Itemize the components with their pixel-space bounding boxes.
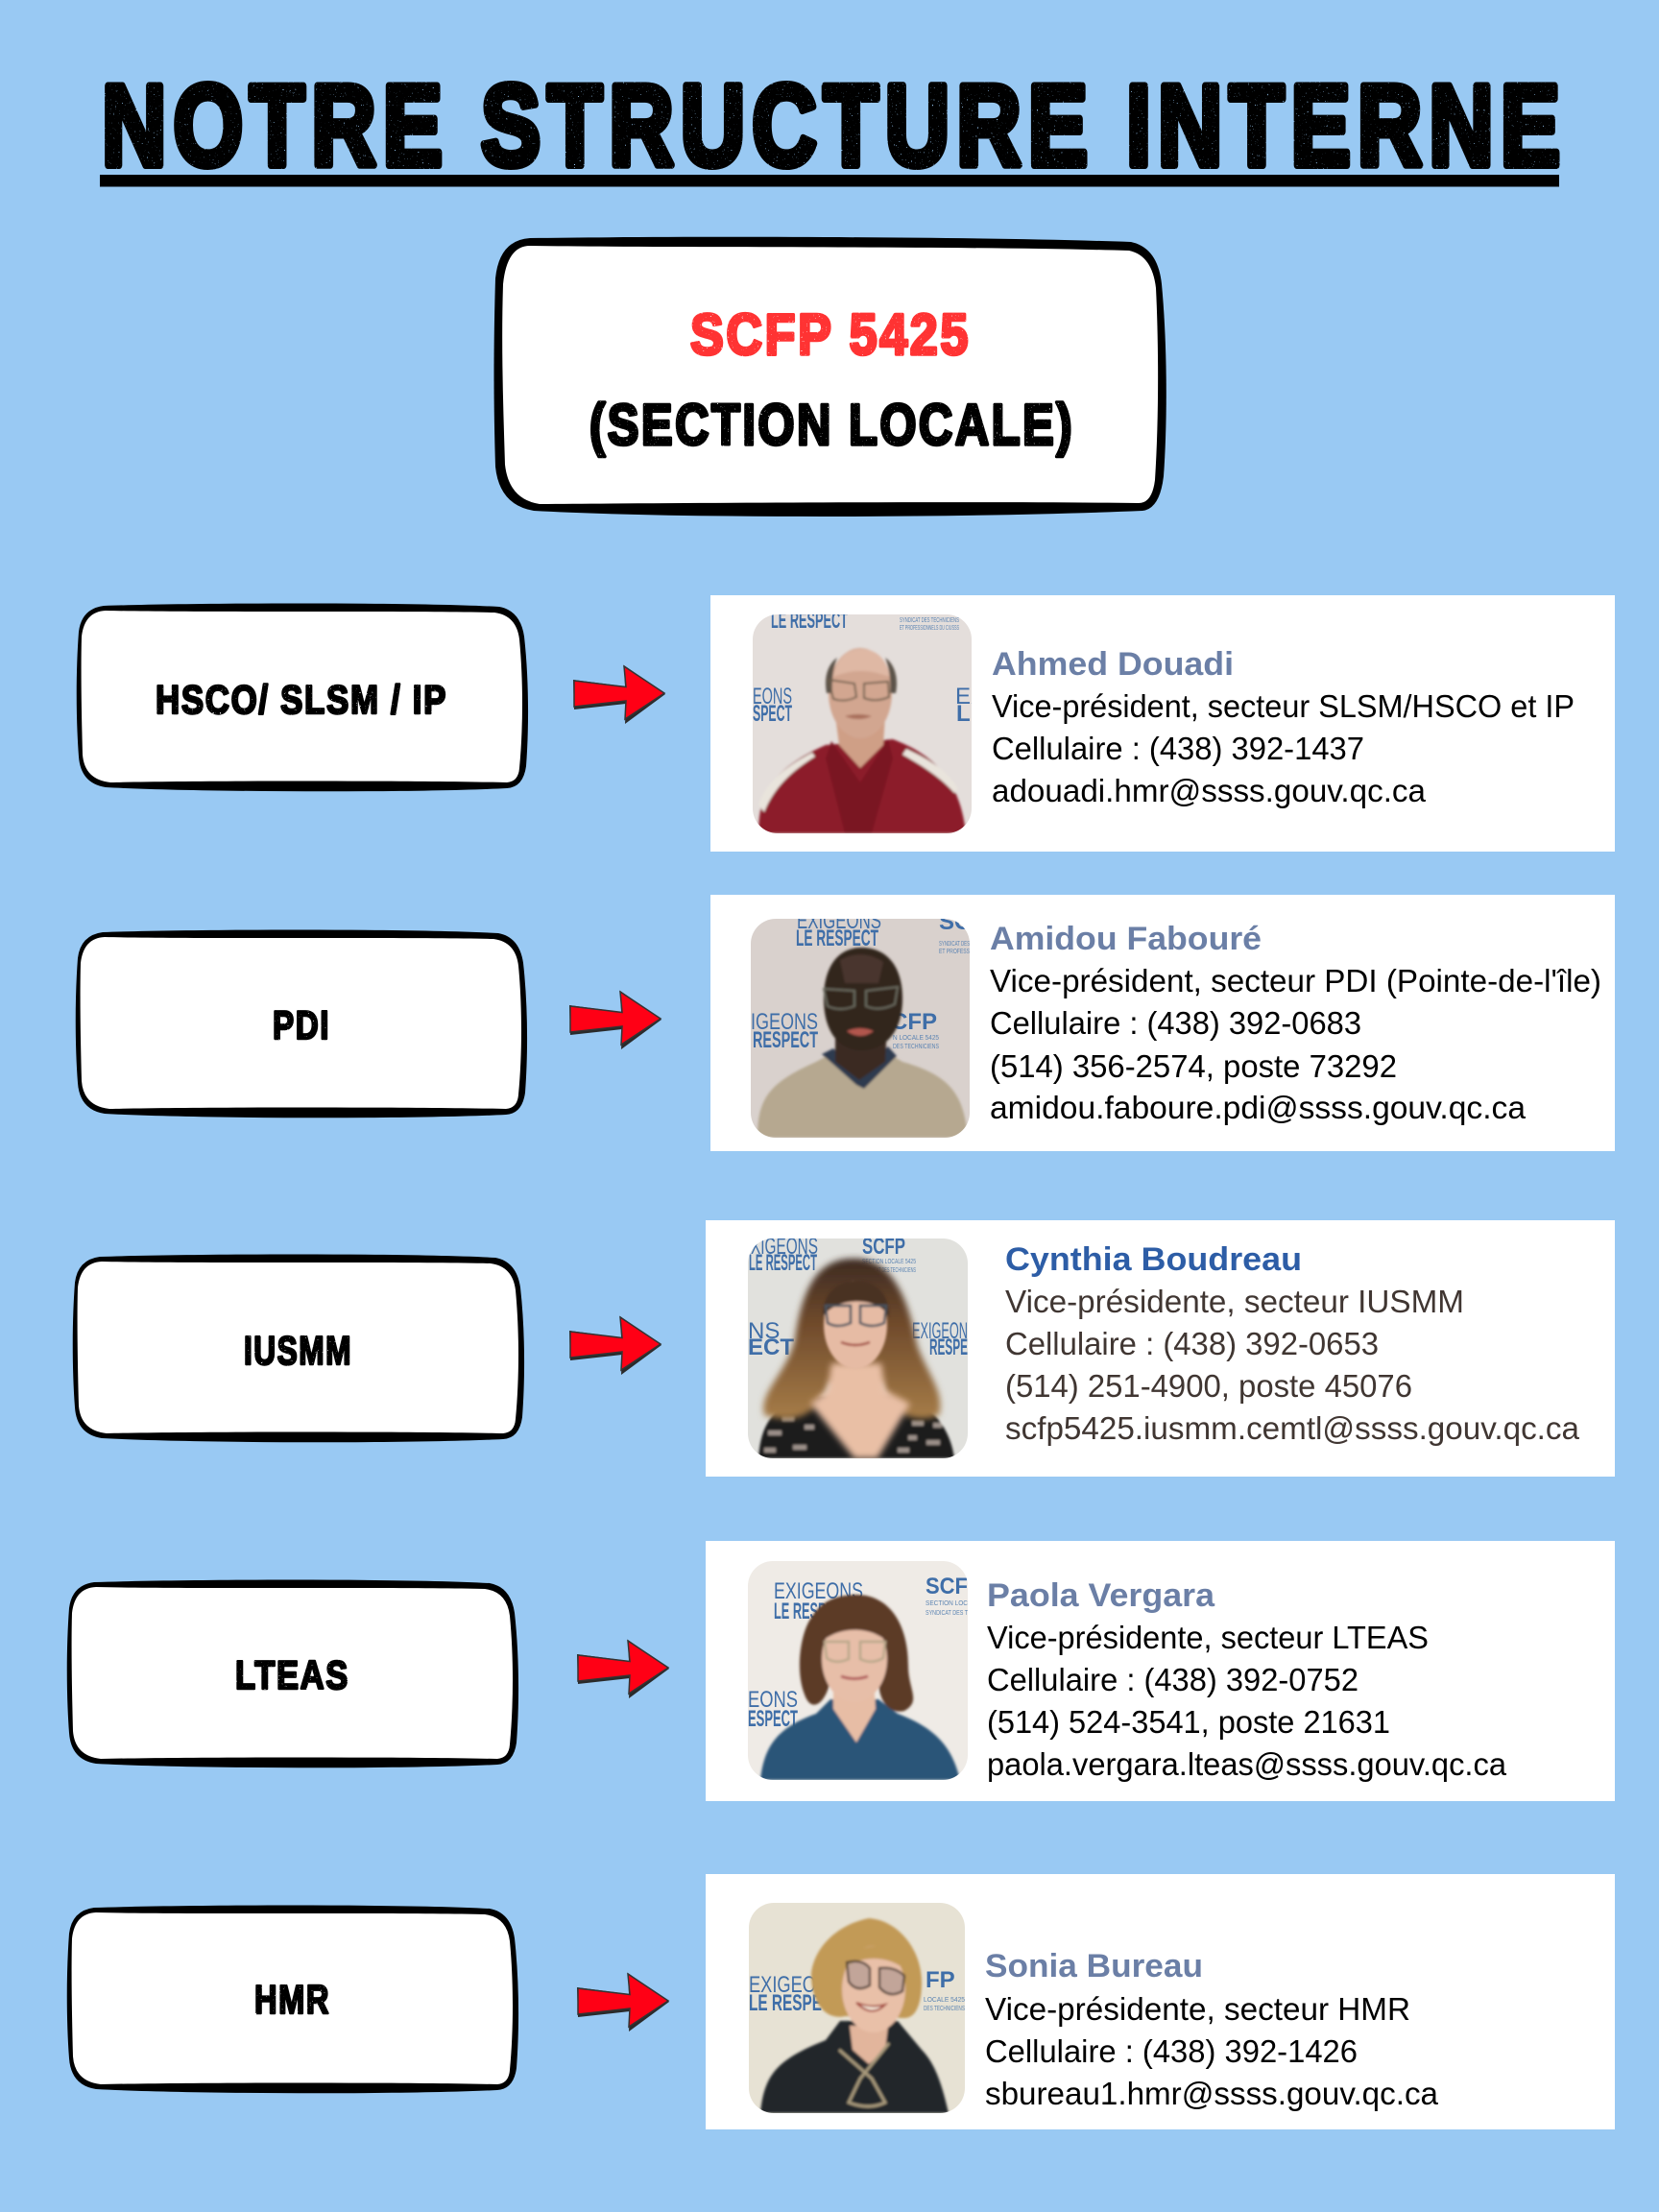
label: HSCO/ SLSM / IP <box>156 677 447 722</box>
panel: contact Cynthia Boudreau: RESPE <box>929 1334 968 1360</box>
photo: Paola Vergara <box>748 1561 969 1780</box>
photo: Cynthia Boudreau: NS <box>748 1318 780 1344</box>
photo: Sonia Bureau: DES TECHNICIENS <box>924 2006 965 2012</box>
photo: Ahmed Douadi: ET PROFESSIONNELS DU CIUSSS <box>900 625 959 632</box>
label: LTEAS <box>235 1652 349 1697</box>
mobile: Cellulaire : (438) 392-0653 <box>1005 1326 1379 1361</box>
mobile: Cellulaire : (438) 392-1437 <box>992 731 1364 766</box>
phone: (514) 356-2574, poste 73292 <box>990 1048 1397 1084</box>
email: sbureau1.hmr@ssss.gouv.qc.ca <box>985 2076 1439 2111</box>
photo: Amidou Fabouré: N LOCALE 5425 <box>893 1035 939 1042</box>
name: Sonia Bureau <box>985 1948 1203 1984</box>
panel: sector HMR <box>67 1905 518 2093</box>
photo: Amidou Fabouré: LE RESPECT <box>796 926 878 951</box>
mobile: Cellulaire : (438) 392-0683 <box>990 1005 1361 1041</box>
email: amidou.faboure.pdi@ssss.gouv.qc.ca <box>990 1090 1527 1125</box>
arrow 5 <box>577 1973 669 2032</box>
name: Paola Vergara <box>987 1577 1215 1614</box>
photo: Sonia Bureau <box>749 1903 965 2113</box>
photo: Cynthia Boudreau: SYNDICAT DES TECHNICIENS <box>862 1267 916 1274</box>
photo: Amidou Fabouré <box>751 908 971 1138</box>
panel: SCFP 5425 section locale <box>493 237 1166 517</box>
mobile: Cellulaire : (438) 392-1426 <box>985 2033 1358 2069</box>
photo: Paola Vergara: SCF <box>926 1574 968 1599</box>
photo: Cynthia Boudreau <box>748 1234 968 1458</box>
email: adouadi.hmr@ssss.gouv.qc.ca <box>992 773 1427 808</box>
photo: Ahmed Douadi: SPECT <box>753 701 792 727</box>
photo: Amidou Fabouré: IGEONS <box>751 1009 818 1035</box>
photo: Sonia Bureau: FP <box>926 1967 955 1993</box>
arrow 2 <box>569 991 661 1049</box>
photo: Amidou Fabouré: DES TECHNICIENS <box>893 1044 939 1050</box>
heading: section locale: (SECTION LOCALE) <box>589 393 1074 457</box>
photo: Paola Vergara: ESPECT <box>748 1706 798 1732</box>
label: PDI <box>273 1002 330 1047</box>
photo: Paola Vergara: EXIGEONS <box>774 1578 863 1604</box>
name: Amidou Fabouré <box>990 921 1262 957</box>
email: paola.vergara.lteas@ssss.gouv.qc.ca <box>987 1746 1507 1782</box>
role: Vice-président, secteur PDI (Pointe-de-l'île) <box>990 963 1601 998</box>
photo: Amidou Fabouré: SYNDICAT DES <box>939 941 970 948</box>
photo: Ahmed Douadi: EONS <box>753 684 792 709</box>
role: Vice-président, secteur SLSM/HSCO et IP <box>992 688 1575 724</box>
photo: Ahmed Douadi: LE <box>956 701 986 727</box>
panel: sector LTEAS <box>67 1580 518 1767</box>
heading: SCFP 5425: SCFP 5425 <box>690 302 971 367</box>
photo: Ahmed Douadi: SYNDICAT DES TECHNICIENS <box>900 617 959 624</box>
photo: Paola Vergara: SECTION LOC <box>926 1600 968 1607</box>
photo: Cynthia Boudreau: LE RESPECT <box>749 1250 817 1276</box>
photo: Ahmed Douadi <box>753 608 986 833</box>
arrow 3 <box>569 1316 661 1375</box>
photo: Amidou Fabouré: ET PROFESS <box>939 949 970 955</box>
panel: sector IUSMM <box>73 1254 524 1442</box>
mobile: Cellulaire : (438) 392-0752 <box>987 1662 1358 1697</box>
photo: Sonia Bureau: EXIGEO <box>749 1972 816 1998</box>
photo: Paola Vergara: SYNDICAT DES T <box>926 1610 969 1617</box>
photo: Cynthia Boudreau: ECT <box>748 1334 794 1360</box>
photo: Cynthia Boudreau: EXIGEON <box>912 1318 968 1344</box>
panel: contact Sonia Bureau <box>706 1874 1615 2129</box>
photo: Cynthia Boudreau: XIGEONS <box>751 1234 818 1260</box>
role: Vice-présidente, secteur IUSMM <box>1005 1284 1464 1319</box>
photo: Sonia Bureau: LE RESPE <box>749 1990 822 2016</box>
photo: Sonia Bureau: LOCALE 5425 <box>924 1997 965 2004</box>
panel: sector PDI <box>76 929 527 1118</box>
photo: Amidou Fabouré: SC <box>939 909 971 935</box>
photo: Ahmed Douadi: EX <box>955 684 986 709</box>
photo: Amidou Fabouré: CFP <box>891 1009 937 1035</box>
name: Cynthia Boudreau <box>1005 1241 1302 1278</box>
panel: contact Paola Vergara <box>706 1541 1615 1801</box>
role: Vice-présidente, secteur HMR <box>985 1991 1410 2027</box>
panel: sector HSCO SLSM IP <box>77 603 528 791</box>
photo: Paola Vergara: LE RESPECT <box>774 1599 851 1624</box>
photo: Ahmed Douadi: LE RESPECT <box>771 608 848 634</box>
label: HMR <box>254 1977 330 2022</box>
photo: Amidou Fabouré: EXIGEONS <box>797 908 881 934</box>
role: Vice-présidente, secteur LTEAS <box>987 1620 1429 1655</box>
photo: Cynthia Boudreau: SCFP <box>862 1234 905 1260</box>
phone: (514) 524-3541, poste 21631 <box>987 1704 1390 1740</box>
label: IUSMM <box>244 1328 352 1373</box>
arrow 1 <box>573 665 665 724</box>
photo: Amidou Fabouré: RESPECT <box>753 1027 818 1053</box>
email: scfp5425.iusmm.cemtl@ssss.gouv.qc.ca <box>1005 1410 1580 1446</box>
phone: (514) 251-4900, poste 45076 <box>1005 1368 1412 1404</box>
photo: Paola Vergara: EONS <box>748 1687 798 1713</box>
photo: Cynthia Boudreau: SECTION LOCALE 5425 <box>862 1259 916 1265</box>
panel: contact Amidou Fabouré <box>710 895 1615 1151</box>
panel: contact Ahmed Douadi <box>710 595 1615 852</box>
name: Ahmed Douadi <box>992 646 1234 683</box>
panel: contact Cynthia Boudreau <box>706 1220 1615 1477</box>
arrow 4 <box>577 1640 669 1698</box>
